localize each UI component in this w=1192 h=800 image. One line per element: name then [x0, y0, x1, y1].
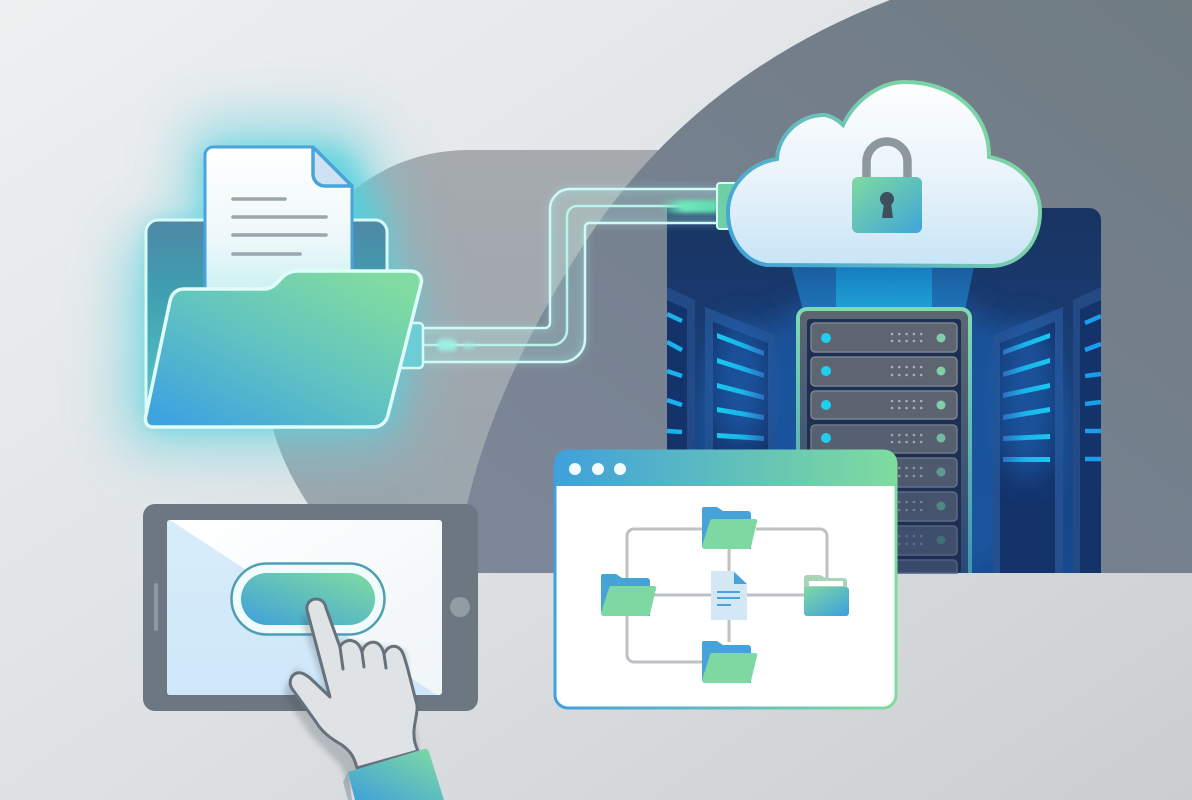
connection wires [424, 189, 722, 362]
hand [284, 599, 444, 800]
document [205, 147, 352, 300]
center document [711, 571, 747, 620]
near right rack [993, 307, 1063, 573]
window dots [569, 463, 626, 475]
server unit 8 [811, 560, 957, 573]
sleeve [348, 749, 444, 800]
server unit 6 [811, 492, 957, 521]
document lines [233, 199, 326, 254]
side connector [395, 323, 423, 368]
screen [167, 520, 442, 695]
light beams [792, 267, 974, 308]
server unit 7 [811, 526, 957, 555]
side speaker [154, 583, 158, 631]
dark grey blob [463, 0, 1192, 573]
server room [667, 208, 1101, 590]
server unit 5 [811, 458, 957, 487]
mid grey blob [268, 150, 680, 530]
folder node top [702, 507, 757, 549]
app window [554, 450, 897, 708]
tablet [143, 504, 478, 711]
server unit 1 [811, 323, 957, 352]
room glow [704, 290, 1064, 590]
near left rack [700, 307, 775, 450]
finger lines [340, 647, 386, 669]
server rack [798, 309, 970, 573]
wire glow [424, 189, 722, 362]
connector lines [627, 529, 827, 662]
hand shadow [284, 612, 420, 790]
touch button [232, 564, 384, 634]
server unit 3 [811, 391, 957, 419]
home button [450, 597, 470, 617]
far left rack [667, 287, 695, 450]
title bar [554, 450, 897, 486]
folder glow [125, 125, 420, 445]
wire bands [424, 189, 722, 362]
folder with document [145, 147, 423, 427]
server unit 2 [811, 357, 957, 386]
hand outline [290, 599, 418, 768]
data pulses [437, 339, 457, 351]
folder node right [804, 575, 849, 616]
sleeve shadow [343, 772, 352, 800]
server unit 4 [811, 425, 957, 453]
padlock [852, 141, 922, 233]
far right rack [1073, 287, 1101, 573]
front panel [145, 271, 421, 427]
cloud with lock [728, 82, 1040, 266]
back panel [146, 220, 387, 418]
cloud [728, 82, 1040, 266]
folder node left [601, 574, 656, 616]
cloud connector [717, 183, 741, 229]
folder node bottom [702, 641, 757, 683]
